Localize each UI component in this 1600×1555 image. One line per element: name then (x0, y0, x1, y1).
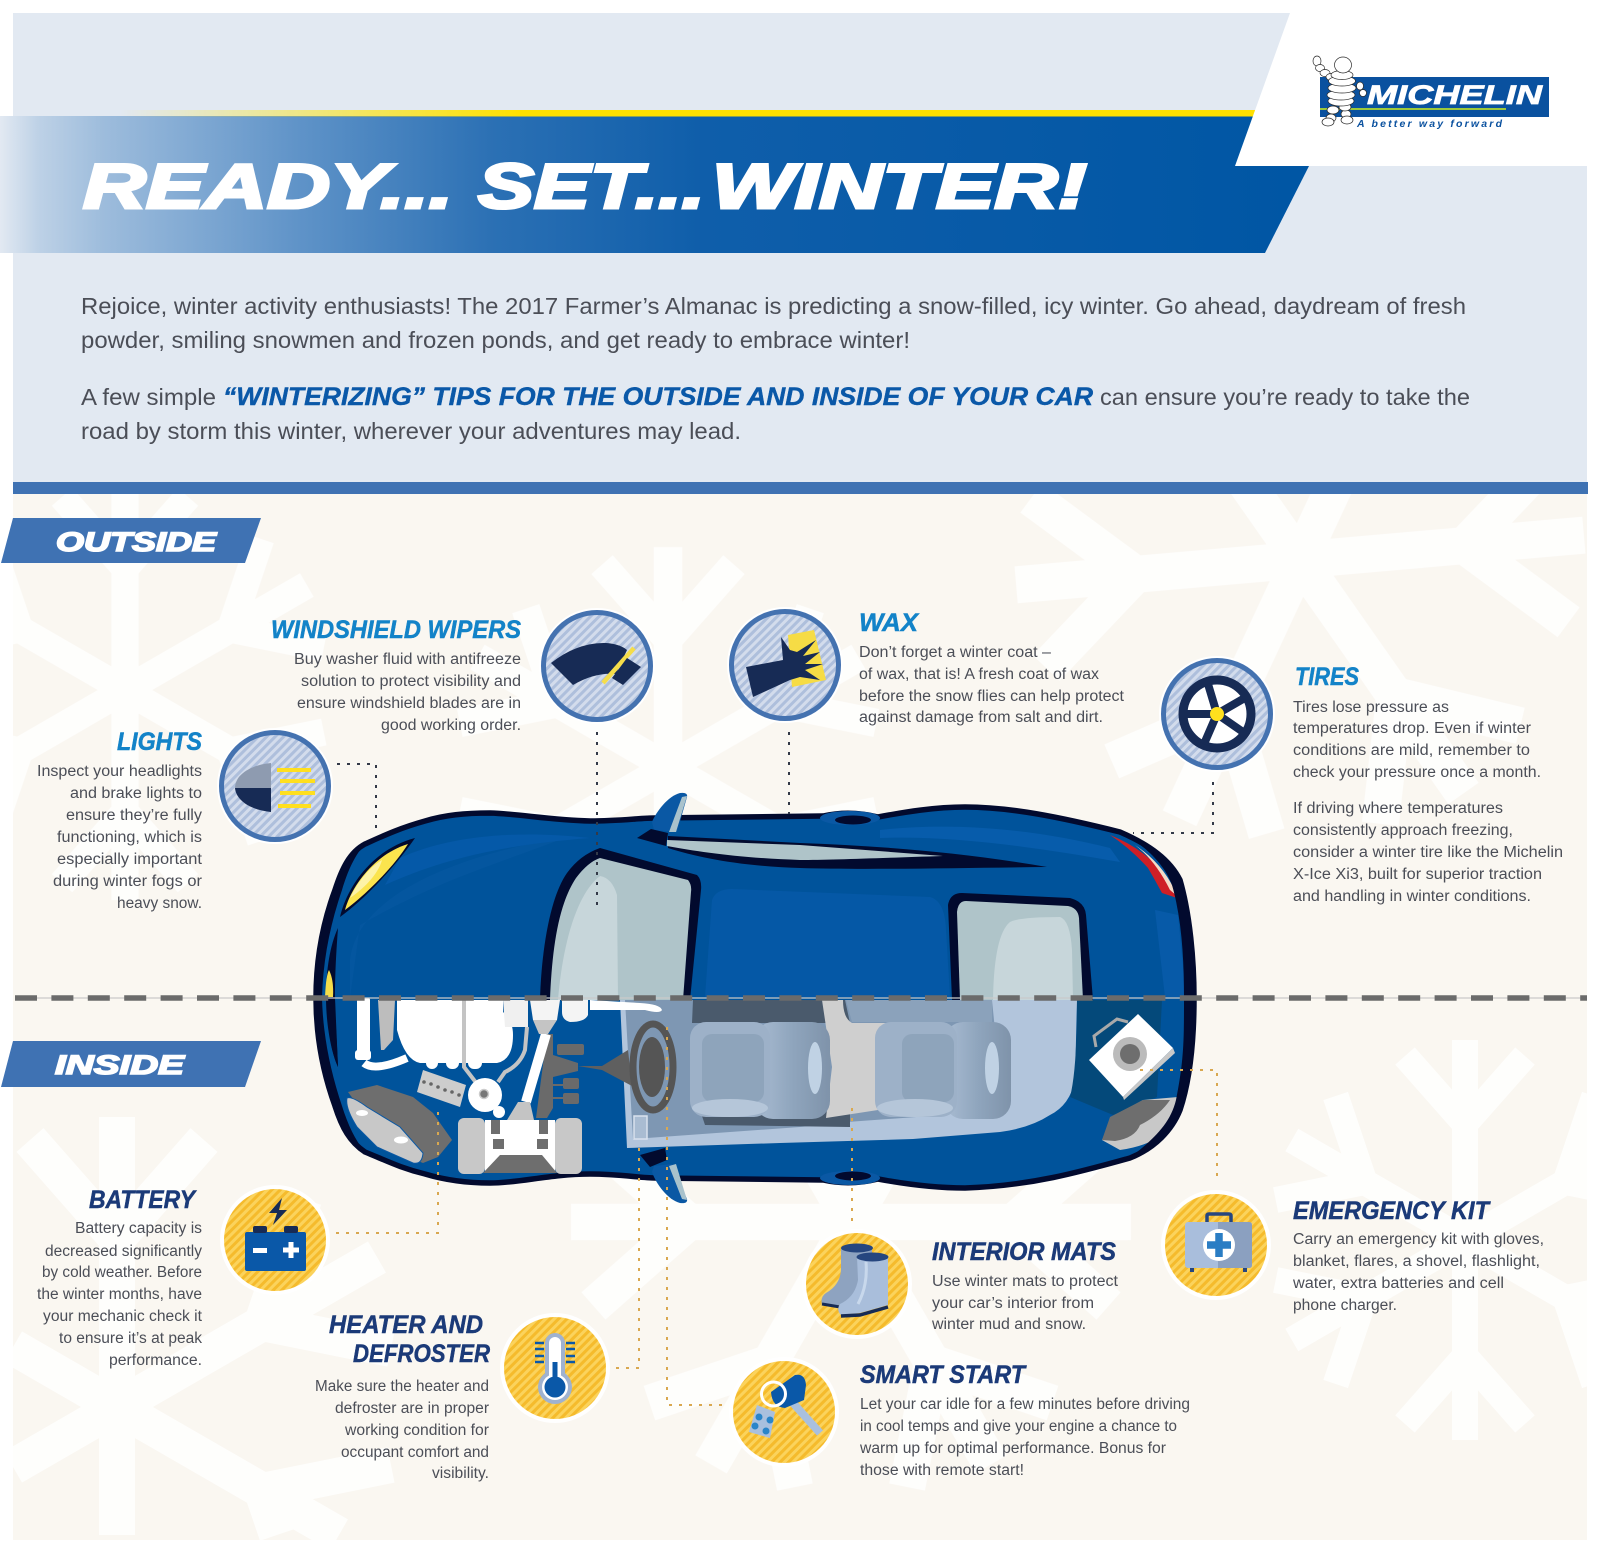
smart start item: those with remote start! (860, 1462, 1024, 1479)
interior mats item: winter mud and snow. (931, 1316, 1086, 1333)
battery item: BATTERY (89, 1186, 197, 1214)
icon: wheel (1159, 656, 1275, 772)
title (83, 152, 1087, 222)
icon: boots (802, 1229, 912, 1339)
rear window (948, 893, 1093, 1000)
intro text: powder, smiling snowmen and frozen ponds, and get ready to embrace winter! (81, 327, 910, 353)
wipers item (271, 608, 655, 734)
distributor (468, 1078, 505, 1118)
intro text: Rejoice, winter activity enthusiasts! The 2017 Farmer’s Almanac is predicting a snow-filled, icy winter. Go ahead, daydream of fresh (81, 293, 1466, 319)
car illustration (316, 793, 1194, 1203)
heater and defroster item: visibility. (432, 1465, 489, 1482)
car body (316, 807, 1194, 1188)
header divider bar (13, 482, 1588, 494)
lights item: during winter fogs or (53, 873, 202, 890)
hoses (464, 1000, 527, 1093)
heater and defroster item: working condition for (344, 1422, 489, 1439)
lights item: Inspect your headlights (37, 763, 202, 780)
wax item: Don’t forget a winter coat – (859, 644, 1051, 661)
title: READY... (83, 152, 453, 222)
intro text: road by storm this winter, wherever your adventures may lead. (81, 418, 741, 444)
tab: outside: OUTSIDE (56, 527, 218, 557)
intro text (81, 293, 1470, 444)
tires item: Tires lose pressure as (1293, 699, 1449, 716)
logo tab (1235, 13, 1587, 166)
tires item: and handling in winter conditions. (1293, 888, 1531, 905)
cabin slate floor (625, 1000, 1000, 1139)
tab: inside: INSIDE (55, 1050, 186, 1080)
dark cabin strip (692, 1000, 850, 1023)
seat: front (690, 1022, 830, 1119)
panel: header background (13, 13, 1587, 483)
smart start item (729, 1357, 1190, 1479)
interior mats item: your car’s interior from (932, 1295, 1094, 1312)
front grille (326, 928, 338, 1067)
emergency kit item: Carry an emergency kit with gloves, (1293, 1231, 1544, 1248)
battery item: by cold weather. Before (42, 1264, 202, 1281)
tires item: conditions are mild, remember to (1293, 742, 1530, 759)
battery item: Battery capacity is (75, 1220, 202, 1237)
interior mats item: INTERIOR MATS (932, 1238, 1116, 1266)
door handle: bottom (820, 1171, 880, 1185)
lights item: ensure they’re fully (66, 807, 202, 824)
dashed divider (15, 997, 1587, 999)
icon: keys (729, 1357, 839, 1467)
battery item: the winter months, have (37, 1286, 202, 1303)
emergency kit item (1161, 1190, 1544, 1314)
mirror: top (637, 793, 687, 846)
rear lamp (1102, 1097, 1178, 1150)
engine block (355, 998, 662, 1069)
heater and defroster item: DEFROSTER (353, 1340, 490, 1368)
Michelin logo: A better way forward (1356, 118, 1503, 130)
tires item: If driving where temperatures (1293, 800, 1503, 817)
Michelin logo: MICHELIN (1367, 80, 1543, 110)
lights item (37, 728, 333, 912)
cabin floor (620, 1000, 1077, 1148)
tail light (1110, 835, 1177, 898)
strut (526, 1020, 557, 1102)
wipers item: ensure windshield blades are in (297, 695, 521, 712)
emergency kit item: phone charger. (1293, 1297, 1397, 1314)
smart start item: SMART START (860, 1361, 1028, 1389)
emergency kit item: blanket, flares, a shovel, flashlight, (1293, 1253, 1540, 1270)
wax item: before the snow flies can help protect (859, 688, 1125, 705)
interior mats item (802, 1229, 1119, 1339)
heater and defroster item: Make sure the heater and (315, 1378, 489, 1395)
heater and defroster item: defroster are in proper (335, 1400, 489, 1417)
tires item: consistently approach freezing, (1293, 822, 1513, 839)
connectors: inside (336, 1027, 1217, 1405)
car battery (417, 1070, 466, 1107)
wipers item: Buy washer fluid with antifreeze (294, 651, 521, 668)
thick outline bands (316, 832, 1194, 1158)
heater and defroster item: occupant comfort and (341, 1444, 489, 1461)
lights item: LIGHTS (117, 728, 202, 756)
tires item: check your pressure once a month. (1293, 764, 1541, 781)
icon: waxing glove (727, 607, 843, 723)
icon: first aid case (1161, 1190, 1271, 1300)
steering wheel (578, 1024, 673, 1110)
slate rear strip (846, 1000, 992, 1022)
front low light (325, 970, 333, 997)
dark drive spine (536, 1034, 584, 1118)
emergency kit item: EMERGENCY KIT (1293, 1197, 1492, 1225)
battery item: decreased significantly (45, 1243, 202, 1260)
front axle (458, 1102, 582, 1174)
banner with title (0, 110, 1309, 253)
tab: outside (1, 518, 261, 563)
connectors: outside (337, 732, 1213, 908)
headlight (340, 838, 415, 917)
trunk (1070, 1000, 1162, 1115)
tires item: temperatures drop. Even if winter (1293, 720, 1531, 737)
icon: thermometer (500, 1313, 610, 1423)
heater and defroster item: HEATER AND (329, 1311, 483, 1339)
icon: Bibendum (1313, 56, 1366, 126)
door handle: top (820, 811, 880, 825)
tires item (1159, 656, 1563, 905)
emergency kit item: water, extra batteries and cell (1292, 1275, 1504, 1292)
wax item: of wax, that is! A fresh coat of wax (859, 666, 1099, 683)
icon: headlight (217, 728, 333, 844)
intro text: “WINTERIZING” TIPS FOR THE OUTSIDE AND INSIDE OF YOUR CAR (223, 383, 1093, 411)
interior bottom half (316, 832, 1194, 1174)
interior mats item: Use winter mats to protect (932, 1273, 1119, 1290)
windshield (540, 848, 701, 1000)
battery item: to ensure it’s at peak (59, 1330, 202, 1347)
title: SET... (478, 152, 705, 222)
battery item (37, 1185, 330, 1369)
side window (667, 836, 1047, 869)
left front lamp (347, 1085, 452, 1163)
spare tire in kit (1089, 1014, 1175, 1100)
intro text: can ensure you’re ready to take the (1100, 384, 1470, 410)
panel: snowy background (13, 494, 1587, 1540)
exterior top half details (325, 827, 1186, 1067)
center console (822, 1000, 890, 1118)
wax item: against damage from salt and dirt. (859, 709, 1103, 726)
lights item: and brake lights to (70, 785, 202, 802)
lower grille (332, 1039, 338, 1067)
icon: wiper (539, 608, 655, 724)
title: WINTER! (712, 152, 1087, 222)
icon: battery (220, 1185, 330, 1295)
tires item: TIRES (1295, 663, 1359, 691)
wipers item: WINDSHIELD WIPERS (271, 616, 521, 644)
lights item: especially important (57, 851, 203, 868)
wax item (727, 607, 1125, 726)
lights item: functioning, which is (57, 829, 202, 846)
mirror: bottom (640, 1148, 687, 1203)
tires item: X-Ice Xi3, built for superior traction (1293, 866, 1542, 883)
battery item: performance. (109, 1352, 202, 1369)
wipers item: good working order. (381, 717, 521, 734)
tires item: consider a winter tire like the Michelin (1293, 844, 1563, 861)
smart start item: Let your car idle for a few minutes before driving (860, 1396, 1190, 1413)
Michelin logo (1313, 56, 1549, 130)
heater and defroster item (315, 1311, 610, 1482)
lights item: heavy snow. (117, 895, 202, 912)
wax item: WAX (859, 609, 919, 637)
tab: inside (1, 1041, 261, 1087)
smart start item: warm up for optimal performance. Bonus for (859, 1440, 1166, 1457)
air vent (634, 1116, 647, 1139)
intro text: A few simple (81, 384, 216, 410)
seat: rear (875, 1022, 1011, 1119)
smart start item: in cool temps and give your engine a chance to (860, 1418, 1177, 1435)
battery item: your mechanic check it (43, 1308, 203, 1325)
wipers item: solution to protect visibility and (301, 673, 521, 690)
